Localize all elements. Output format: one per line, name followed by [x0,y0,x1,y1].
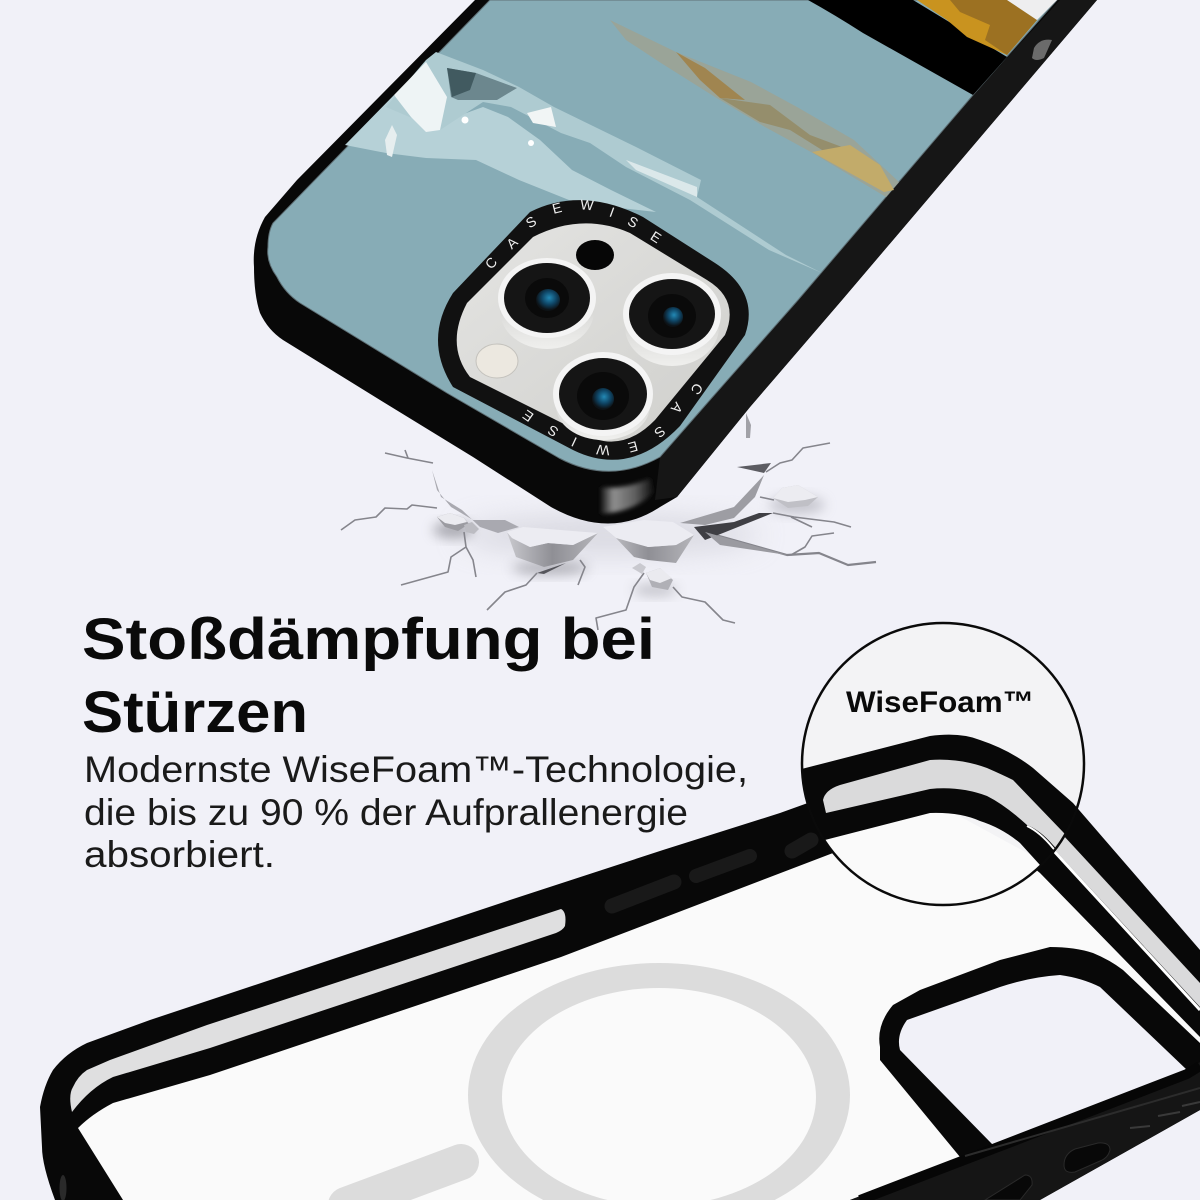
slab chunks [507,532,598,567]
body text: absorbiert. [84,834,275,875]
white print corner [1007,0,1057,20]
callout circle: magnified WiseFoam edge [803,734,1073,869]
flash [476,344,518,378]
brand text on camera surround: E [520,407,536,425]
microphone hole [576,240,614,270]
brand text on camera surround: S [545,422,561,440]
right side strip [1053,835,1200,1010]
illustration: cracked ground [341,413,876,630]
brand text on camera surround: C [688,380,706,398]
body text: die bis zu 90 % der Aufprallenergie [84,792,688,833]
side buttons [612,840,811,906]
brand text on camera surround: E [626,438,640,456]
brand text on camera surround: W [595,441,610,459]
teal back panel [268,0,1057,471]
brand text on camera surround: I [569,434,579,450]
black print band [808,0,1007,95]
heading: Stürzen [82,680,308,745]
brand text on camera surround: S [625,213,641,231]
brand text on camera surround: A [503,233,521,252]
case side highlight [655,0,1097,500]
brand text on camera surround: S [651,423,669,441]
case shell [254,0,1097,524]
illustration: top phone in case [254,0,1097,524]
lens bottom [553,352,653,440]
left side strip [70,909,565,1112]
bottom corner reflection [600,478,654,514]
side button highlight [1032,40,1052,60]
brand text on camera surround: S [523,213,539,231]
orange brush stroke [610,20,899,197]
heading: Stoßdämpfung bei [82,607,655,672]
brand text on camera surround [482,196,706,459]
small rocks [437,513,469,531]
MagSafe ring [468,963,850,1200]
callout label: WiseFoam™ [846,686,1034,719]
lens top left [498,258,596,349]
brand text on camera surround: I [607,204,617,220]
orange print [917,0,1037,55]
brand text on camera surround: C [482,254,500,272]
white brush stroke [345,52,822,273]
bottom buttons [985,1143,1110,1200]
callout circle outline [802,623,1084,905]
body text [84,749,748,875]
camera surround [438,200,749,460]
case frame [40,760,1200,1200]
broken slab sides [432,470,519,533]
charging port hole [60,1175,66,1200]
brand text on camera surround: E [551,199,563,217]
brand text on camera surround: W [580,196,595,214]
heading [82,607,655,745]
illustration: clear case [40,760,1200,1200]
body text: Modernste WiseFoam™-Technologie, [84,749,748,790]
bottom edge panel [850,1062,1200,1200]
alignment pill [346,1162,461,1200]
camera plate [457,223,730,442]
clear interior [78,800,1200,1200]
camera cutout opening [899,975,1187,1145]
brand text on camera surround: A [668,399,686,417]
cracks [341,443,876,630]
lens right [623,273,721,366]
brand text on camera surround: E [648,228,664,246]
camera cutout frame [879,947,1200,1157]
